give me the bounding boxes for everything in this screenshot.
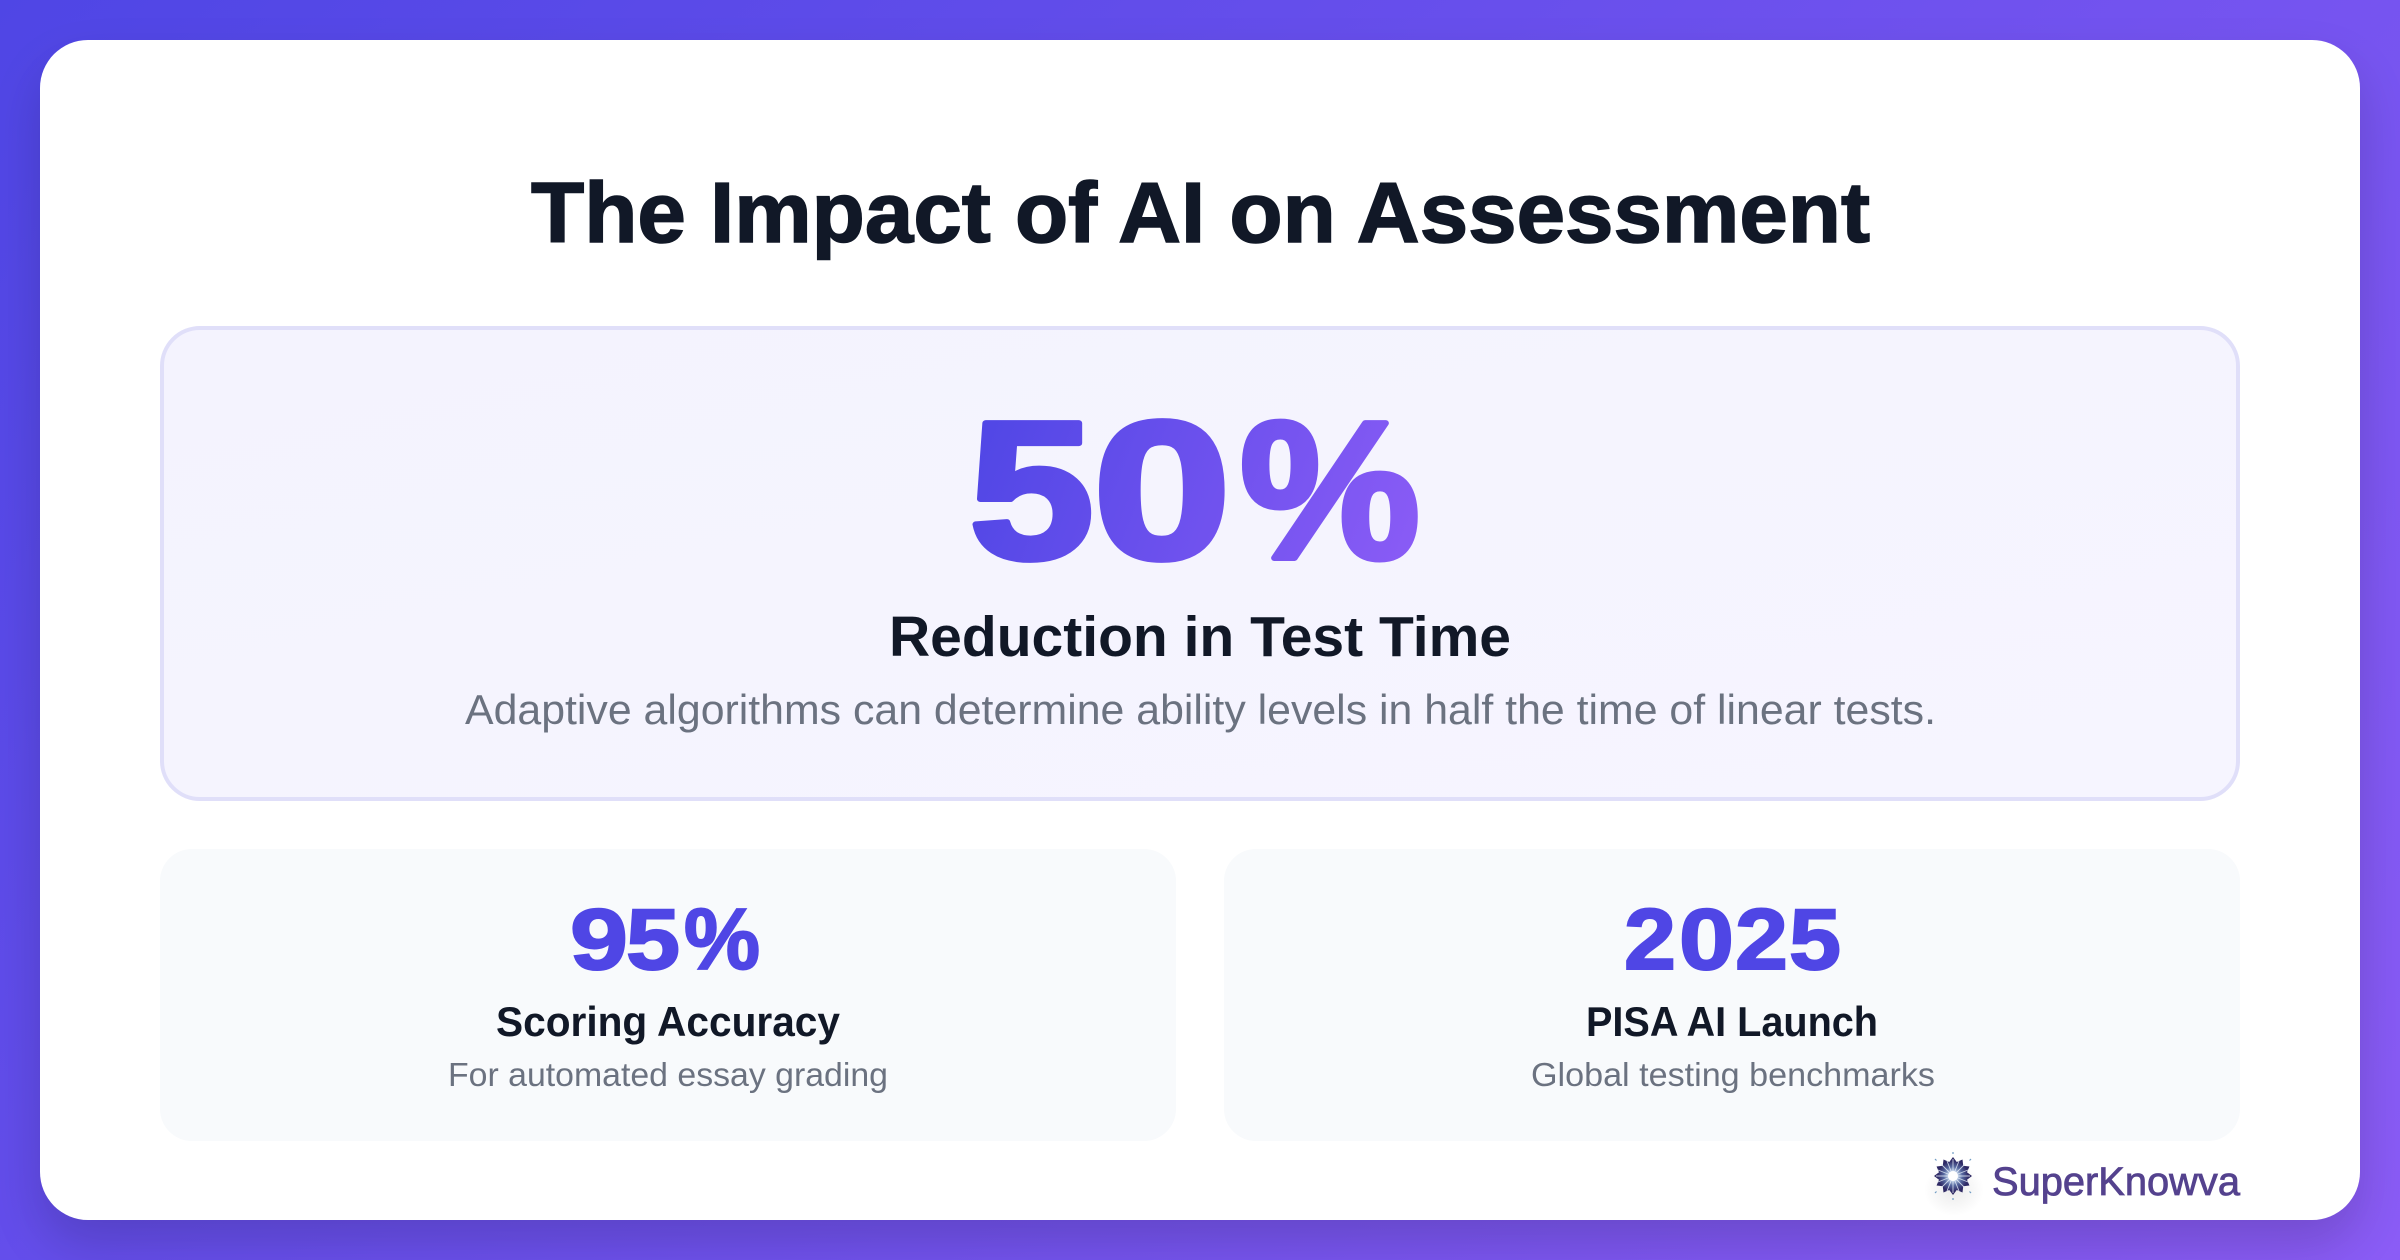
stat label: PISA AI Launch bbox=[1586, 998, 1878, 1045]
stat number: 9 bbox=[570, 892, 628, 988]
hero description: Adaptive algorithms can determine ability levels in half the time of linear tests. bbox=[465, 686, 1936, 733]
hero number: % bbox=[1240, 381, 1420, 600]
panel: PISA AI launch bbox=[1224, 849, 2240, 1141]
stat number: 5 bbox=[1789, 892, 1841, 988]
wordmark: SuperKnowva bbox=[1992, 1160, 2241, 1204]
stat description: For automated essay grading bbox=[448, 1056, 888, 1093]
panel: hero stat bbox=[162, 328, 2238, 799]
hero label: Reduction in Test Time bbox=[889, 605, 1511, 669]
stat number: 2 bbox=[1735, 892, 1788, 988]
title: The Impact of AI on Assessment bbox=[531, 166, 1870, 261]
stat label: Scoring Accuracy bbox=[496, 998, 841, 1045]
stat number: 0 bbox=[1679, 892, 1734, 988]
panel: scoring accuracy bbox=[160, 849, 1176, 1141]
hero number: 0 bbox=[1093, 381, 1231, 600]
stat number: % bbox=[684, 892, 760, 988]
stat number: 2 bbox=[1624, 892, 1676, 988]
hero number: 5 bbox=[969, 381, 1094, 600]
logo: SuperKnowva bbox=[1924, 1152, 2241, 1216]
stat description: Global testing benchmarks bbox=[1531, 1056, 1935, 1093]
stat number: 5 bbox=[626, 892, 680, 988]
icon: star emblem bbox=[1934, 1152, 1972, 1200]
